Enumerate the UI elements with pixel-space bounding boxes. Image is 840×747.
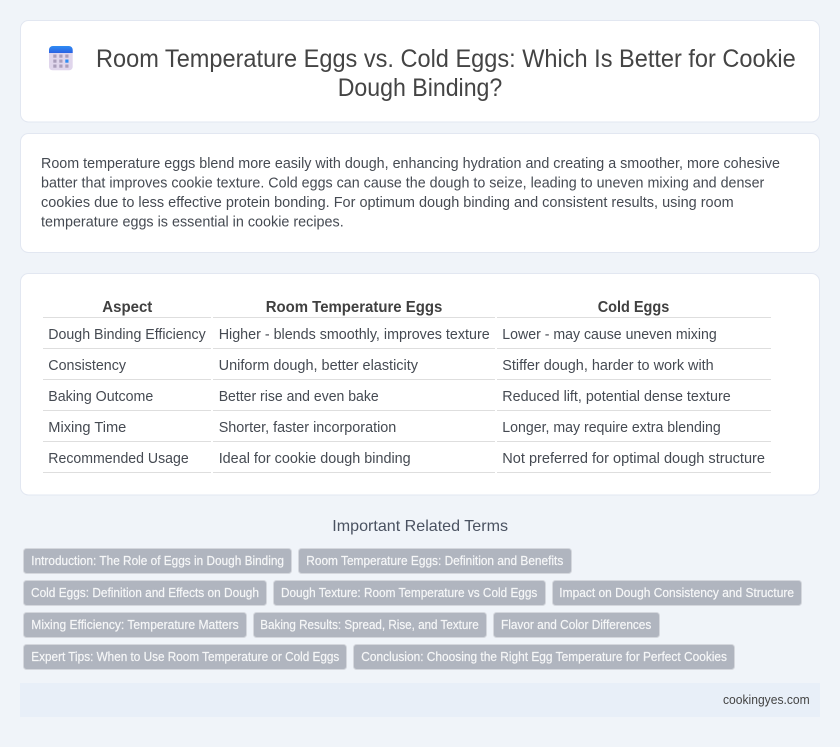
- footer bar: [20, 683, 820, 717]
- tag: [494, 612, 660, 638]
- tag: Introduction: The Role of Eggs in Dough Binding: [31, 554, 284, 568]
- tag: Baking Results: Spread, Rise, and Texture: [260, 618, 479, 632]
- heading: important related terms: Important Related Terms: [332, 518, 508, 535]
- tag: Room Temperature Eggs: Definition and Benefits: [306, 554, 563, 568]
- tag: Flavor and Color Differences: [501, 618, 651, 632]
- row: recommended usage: Recommended Usage: [48, 451, 189, 467]
- tag: Expert Tips: When to Use Room Temperature or Cold Eggs: [31, 650, 339, 664]
- title: [96, 45, 796, 102]
- summary text: Room temperature eggs blend more easily with dough, enhancing hydration and creating a smoother, more cohesive: [41, 156, 780, 172]
- footer source: cookingyes.com: [723, 692, 810, 707]
- title: Dough Binding?: [338, 74, 502, 102]
- row: recommended usage: Ideal for cookie dough binding: [219, 451, 411, 467]
- title: Room Temperature Eggs vs. Cold Eggs: Which Is Better for Cookie: [96, 45, 796, 73]
- row: mixing time: Longer, may require extra blending: [502, 420, 721, 436]
- tag: Impact on Dough Consistency and Structure: [559, 586, 794, 600]
- tag: [24, 548, 292, 574]
- row: mixing time: Shorter, faster incorporation: [219, 420, 396, 436]
- panel: comparison table: [20, 274, 820, 495]
- row: mixing time: [43, 420, 771, 442]
- row: baking outcome: Baking Outcome: [48, 389, 153, 405]
- row: mixing time: Mixing Time: [48, 420, 126, 436]
- table header: Aspect: [102, 299, 152, 316]
- summary text: [41, 156, 780, 230]
- row: recommended usage: Not preferred for optimal dough structure: [502, 451, 765, 467]
- table header: Cold Eggs: [598, 299, 670, 316]
- summary text: temperature eggs is essential in cookie recipes.: [41, 214, 344, 230]
- summary text: cookies due to less effective protein bonding. For optimum dough binding and consistent results, using room: [41, 195, 734, 211]
- row: dough binding efficiency: Higher - blends smoothly, improves texture: [219, 327, 490, 343]
- tag: [298, 548, 572, 574]
- related terms tags: [24, 548, 802, 670]
- row: consistency: [43, 358, 771, 380]
- tag: Cold Eggs: Definition and Effects on Dough: [31, 586, 259, 600]
- tag: Dough Texture: Room Temperature vs Cold Eggs: [281, 586, 537, 600]
- row: consistency: Stiffer dough, harder to work with: [502, 358, 714, 374]
- panel: title card: [20, 20, 820, 122]
- tag: [24, 612, 246, 638]
- table header: Room Temperature Eggs: [266, 299, 443, 316]
- row: dough binding efficiency: Lower - may cause uneven mixing: [502, 327, 717, 343]
- panel: summary paragraph: [20, 134, 820, 252]
- row: baking outcome: Better rise and even bake: [219, 389, 379, 405]
- tag: [274, 580, 546, 606]
- row: baking outcome: [43, 389, 771, 411]
- tag: [254, 612, 486, 638]
- row: recommended usage: [43, 451, 771, 473]
- table header: [43, 299, 771, 318]
- tag: [24, 580, 266, 606]
- icon: calendar: [49, 46, 73, 70]
- tag: Conclusion: Choosing the Right Egg Temperature for Perfect Cookies: [361, 650, 727, 664]
- row: dough binding efficiency: Dough Binding Efficiency: [48, 327, 206, 343]
- row: dough binding efficiency: [43, 327, 771, 349]
- row: baking outcome: Reduced lift, potential dense texture: [502, 389, 731, 405]
- row: consistency: Consistency: [48, 358, 127, 374]
- tag: Mixing Efficiency: Temperature Matters: [31, 618, 239, 632]
- tag: [24, 644, 346, 670]
- tag: [552, 580, 802, 606]
- summary text: batter that improves cookie texture. Cold eggs can cause the dough to seize, leading to uneven mixing and denser: [41, 176, 764, 192]
- row: consistency: Uniform dough, better elasticity: [219, 358, 419, 374]
- tag: [354, 644, 734, 670]
